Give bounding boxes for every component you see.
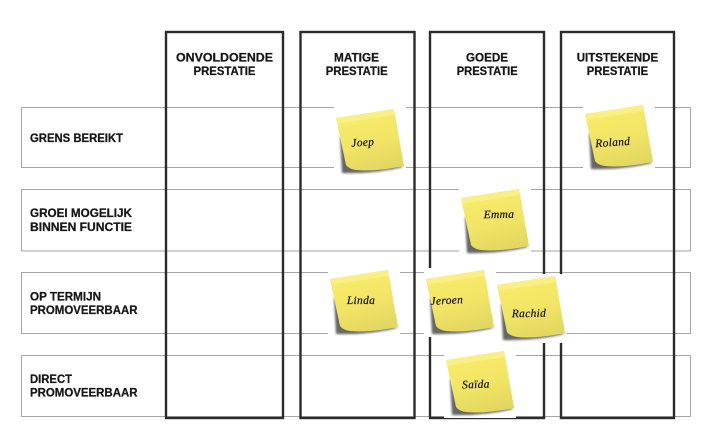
- column: matige prestatie: PRESTATIE: [326, 64, 388, 78]
- sticky note: Joep: Joep: [351, 136, 375, 150]
- sticky note: Emma: Emma: [483, 209, 514, 221]
- sticky note: Linda: [328, 268, 400, 337]
- column: onvoldoende prestatie: [166, 32, 283, 418]
- row: direct promoveerbaar: PROMOVEERBAAR: [30, 386, 138, 400]
- row: groei mogelijk binnen functie: [22, 190, 690, 251]
- column: onvoldoende prestatie: PRESTATIE: [194, 64, 256, 78]
- column: goede prestatie: GOEDE: [466, 50, 508, 64]
- sticky note: Jeroen: Jeroen: [430, 294, 463, 308]
- row: direct promoveerbaar: DIRECT: [30, 372, 73, 386]
- sticky note: Saïda: Saïda: [462, 379, 490, 391]
- column: onvoldoende prestatie: ONVOLDOENDE: [176, 50, 273, 64]
- sticky note: Roland: Roland: [594, 136, 631, 150]
- column: goede prestatie: [430, 32, 544, 418]
- column: uitstekende prestatie: [561, 32, 674, 418]
- row: op termijn promoveerbaar: OP TERMIJN: [30, 290, 101, 304]
- row: op termijn promoveerbaar: [22, 272, 690, 334]
- row: op termijn promoveerbaar: PROMOVEERBAAR: [30, 303, 138, 317]
- sticky note: Linda: Linda: [346, 295, 375, 307]
- row: direct promoveerbaar: [22, 356, 690, 416]
- row: grens bereikt: GRENS BEREIKT: [30, 131, 124, 145]
- column: matige prestatie: [300, 32, 414, 418]
- column: goede prestatie: PRESTATIE: [457, 64, 518, 78]
- sticky note: Roland: [583, 103, 655, 172]
- sticky note: Saïda: [444, 349, 516, 418]
- column: uitstekende prestatie: PRESTATIE: [587, 64, 648, 78]
- row: grens bereikt: [22, 108, 690, 168]
- sticky note: Emma: [459, 187, 531, 256]
- sticky note: Joep: [334, 107, 406, 176]
- row: groei mogelijk binnen functie: GROEI MOGELIJK: [30, 206, 132, 220]
- sticky note: Jeroen: [424, 268, 496, 337]
- column: matige prestatie: MATIGE: [334, 50, 379, 64]
- sticky note: Rachid: Rachid: [511, 308, 546, 320]
- column: uitstekende prestatie: UITSTEKENDE: [577, 50, 658, 64]
- sticky note: Rachid: [495, 274, 567, 343]
- row: groei mogelijk binnen functie: BINNEN FUNCTIE: [30, 220, 132, 234]
